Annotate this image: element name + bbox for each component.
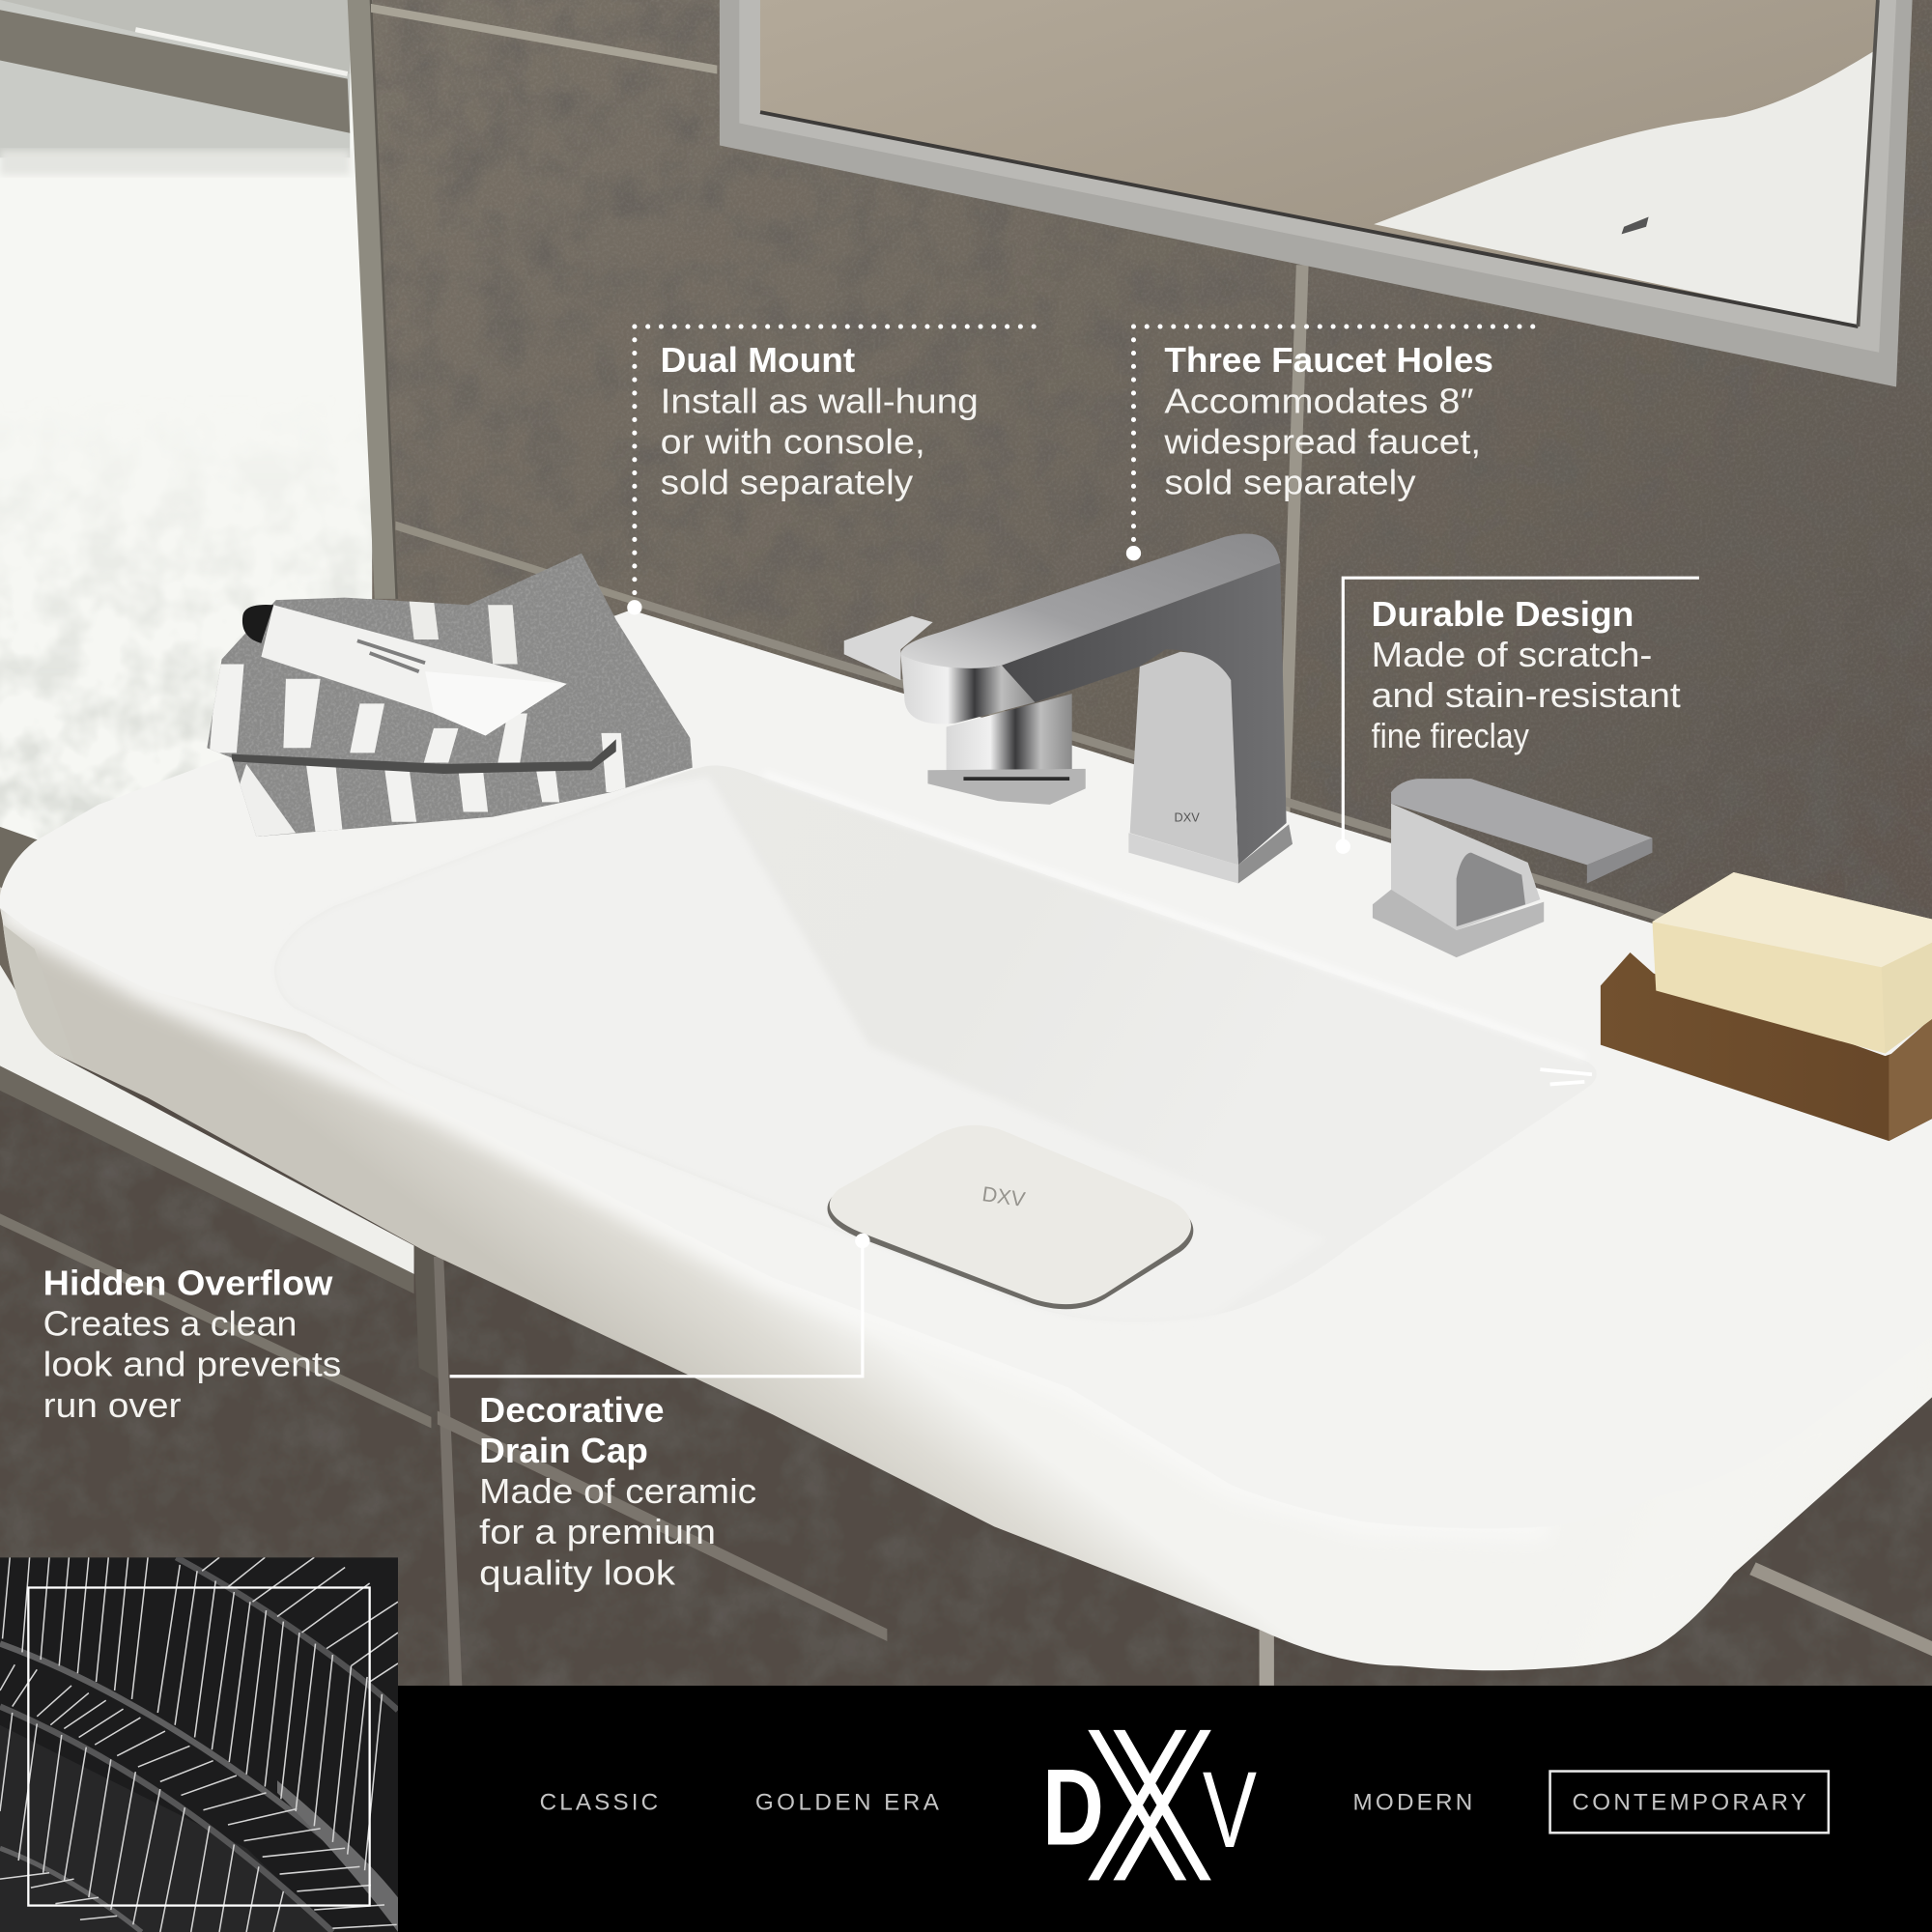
soap and wooden dish	[1601, 872, 1932, 1141]
callout: dual mount: sold separately	[661, 463, 913, 501]
callout: durable design: and stain-resistant	[1372, 676, 1681, 715]
style: contemporary (selected): CONTEMPORARY	[1573, 1790, 1806, 1816]
callout: decorative drain cap: Decorative	[479, 1391, 664, 1430]
callout: dual mount: Install as wall-hung	[661, 382, 979, 420]
callout: decorative drain cap	[450, 1234, 870, 1592]
callout: three faucet holes: Three Faucet Holes	[1164, 341, 1493, 380]
callout: hidden overflow	[43, 1264, 341, 1425]
basin	[274, 765, 1597, 1322]
towel and tube	[203, 549, 702, 844]
spout top	[900, 534, 1280, 669]
callout: dual mount: Dual Mount	[661, 341, 855, 380]
spout base	[1128, 824, 1293, 884]
style: golden era: GOLDEN ERA	[755, 1790, 940, 1816]
callout: durable design: Made of scratch-	[1372, 636, 1652, 674]
sink front face	[0, 863, 1932, 1700]
style: modern: MODERN	[1353, 1790, 1472, 1816]
faucet: center spout	[900, 534, 1293, 884]
callout: durable design	[1336, 578, 1699, 854]
photo background: bathroom wall and window	[0, 0, 1932, 1233]
faucet: right handle	[1373, 779, 1652, 957]
callout: hidden overflow: run over	[43, 1386, 182, 1425]
DXV logo: V	[1203, 1748, 1257, 1870]
callout: decorative drain cap: quality look	[479, 1553, 675, 1592]
soap	[1652, 872, 1932, 1054]
callout: hidden overflow: Creates a clean	[43, 1305, 297, 1344]
mirror	[720, 0, 1913, 387]
logo mark on spout: DXV	[1175, 810, 1200, 825]
spout front chrome	[900, 654, 1035, 724]
spout dark face	[1002, 563, 1287, 865]
sink top deck	[0, 610, 1932, 1528]
towel	[203, 549, 702, 844]
callout: hidden overflow: Hidden Overflow	[43, 1264, 333, 1303]
callout: decorative drain cap: Made of ceramic	[479, 1472, 756, 1511]
callout: dual mount: or with console,	[661, 422, 925, 461]
faucet: left handle	[844, 616, 1086, 805]
callout: hidden overflow: look and prevents	[43, 1346, 341, 1384]
callout: three faucet holes	[1126, 327, 1543, 560]
dish	[1601, 952, 1932, 1141]
callout: durable design: fine fireclay	[1372, 717, 1529, 755]
DXV logo: D	[1042, 1746, 1104, 1867]
inset frame	[28, 1587, 370, 1906]
spout column	[1130, 652, 1238, 865]
footer bar	[399, 1687, 1932, 1932]
dark sill behind sink	[0, 827, 49, 894]
DXV logo	[1042, 1730, 1257, 1880]
window view	[0, 0, 397, 887]
callout: three faucet holes: widespread faucet,	[1163, 422, 1481, 461]
tube	[242, 605, 567, 735]
drain cap: DXV	[980, 1181, 1027, 1211]
architectural pattern panel	[0, 1557, 398, 1932]
style: contemporary (selected)	[1550, 1772, 1829, 1833]
callout: decorative drain cap: for a premium	[479, 1513, 716, 1551]
callout: three faucet holes: Accommodates 8″	[1164, 382, 1474, 420]
callout: durable design: Durable Design	[1372, 595, 1634, 634]
drain cap	[828, 1125, 1193, 1309]
sink	[0, 610, 1932, 1700]
lower wall tiles and under-sink light	[0, 965, 1932, 1686]
basin floor slope	[274, 777, 1327, 1322]
style: classic: CLASSIC	[540, 1790, 658, 1816]
callout: three faucet holes: sold separately	[1164, 463, 1416, 501]
callout: dual mount	[627, 327, 1041, 614]
callout: decorative drain cap: Drain Cap	[479, 1432, 648, 1470]
